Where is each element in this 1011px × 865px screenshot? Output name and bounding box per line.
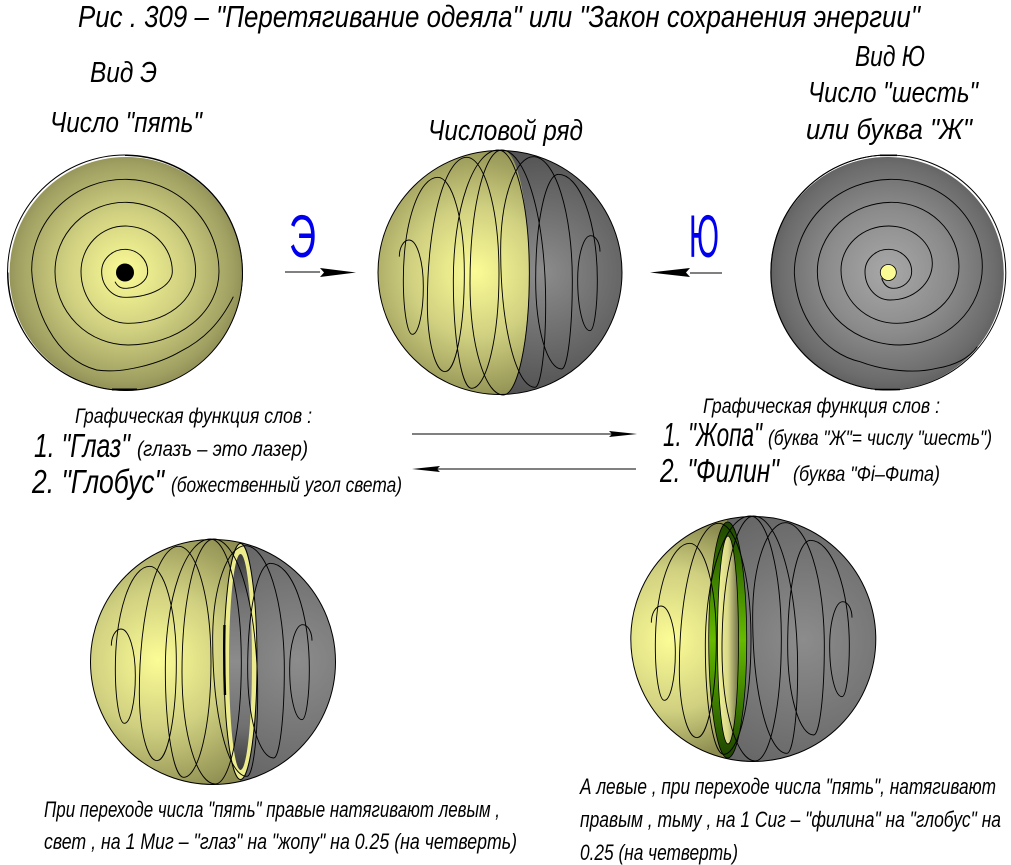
- heading: view E: [50, 57, 203, 139]
- sphere: number series: [378, 150, 622, 395]
- text block: left word function: Графическая функция слов :: [75, 405, 312, 428]
- green ring: [709, 522, 747, 758]
- sphere: number six spiral: [771, 155, 1006, 390]
- caption: right: 0.25 (на четверть): [580, 840, 738, 865]
- text block: left word function: (божественный угол света): [171, 474, 402, 497]
- text: Ю: [689, 203, 719, 270]
- heading: view Yu: Число "шесть": [808, 77, 979, 109]
- heading: view E: Число "пять": [50, 107, 203, 139]
- sphere: light shift with yellow ring: [90, 539, 336, 784]
- caption: left: свет , на 1 Миг – "глаз" на "жопу" на 0.25 (на четверть): [44, 829, 517, 854]
- heading: view E: Вид Э: [90, 57, 157, 89]
- heading: view Yu: Вид Ю: [855, 41, 925, 73]
- text block: right word function: Графическая функция слов :: [703, 395, 940, 418]
- text block: left word function: (глазъ – это лазер): [137, 438, 308, 461]
- text block: right word function: 2. "Филин": [659, 452, 780, 489]
- arrow: Yu to series: [650, 268, 722, 277]
- text block: left word function: [31, 405, 402, 500]
- sphere: darkness shift with green ring: [631, 516, 876, 762]
- text block: right word function: (буква "Фі–Фита): [793, 463, 940, 486]
- arrow: E to series: [285, 268, 356, 277]
- caption: left: [44, 797, 517, 854]
- text block: left word function: 2. "Глобус": [31, 463, 165, 500]
- sphere: number five spiral: [8, 155, 242, 390]
- yellow ring: [224, 544, 257, 780]
- icon: black centre dot: [116, 264, 134, 282]
- arrow: right long: [412, 431, 637, 437]
- heading: view Yu: или буква "Ж": [806, 114, 974, 146]
- caption: right: [578, 774, 1001, 865]
- arrow: left long: [412, 466, 636, 472]
- text block: right word function: 1. "Жопа": [663, 416, 763, 453]
- caption: left: При переходе числа "пять" правые натягивают левым ,: [44, 797, 500, 822]
- text block: right word function: [659, 395, 992, 489]
- icon: yellow centre dot: [880, 264, 896, 280]
- heading: number series: Числовой ряд: [428, 115, 583, 147]
- heading: view Yu: [806, 41, 979, 146]
- letter: blue E: Э: [289, 203, 316, 270]
- text block: left word function: 1. "Глаз": [34, 427, 131, 464]
